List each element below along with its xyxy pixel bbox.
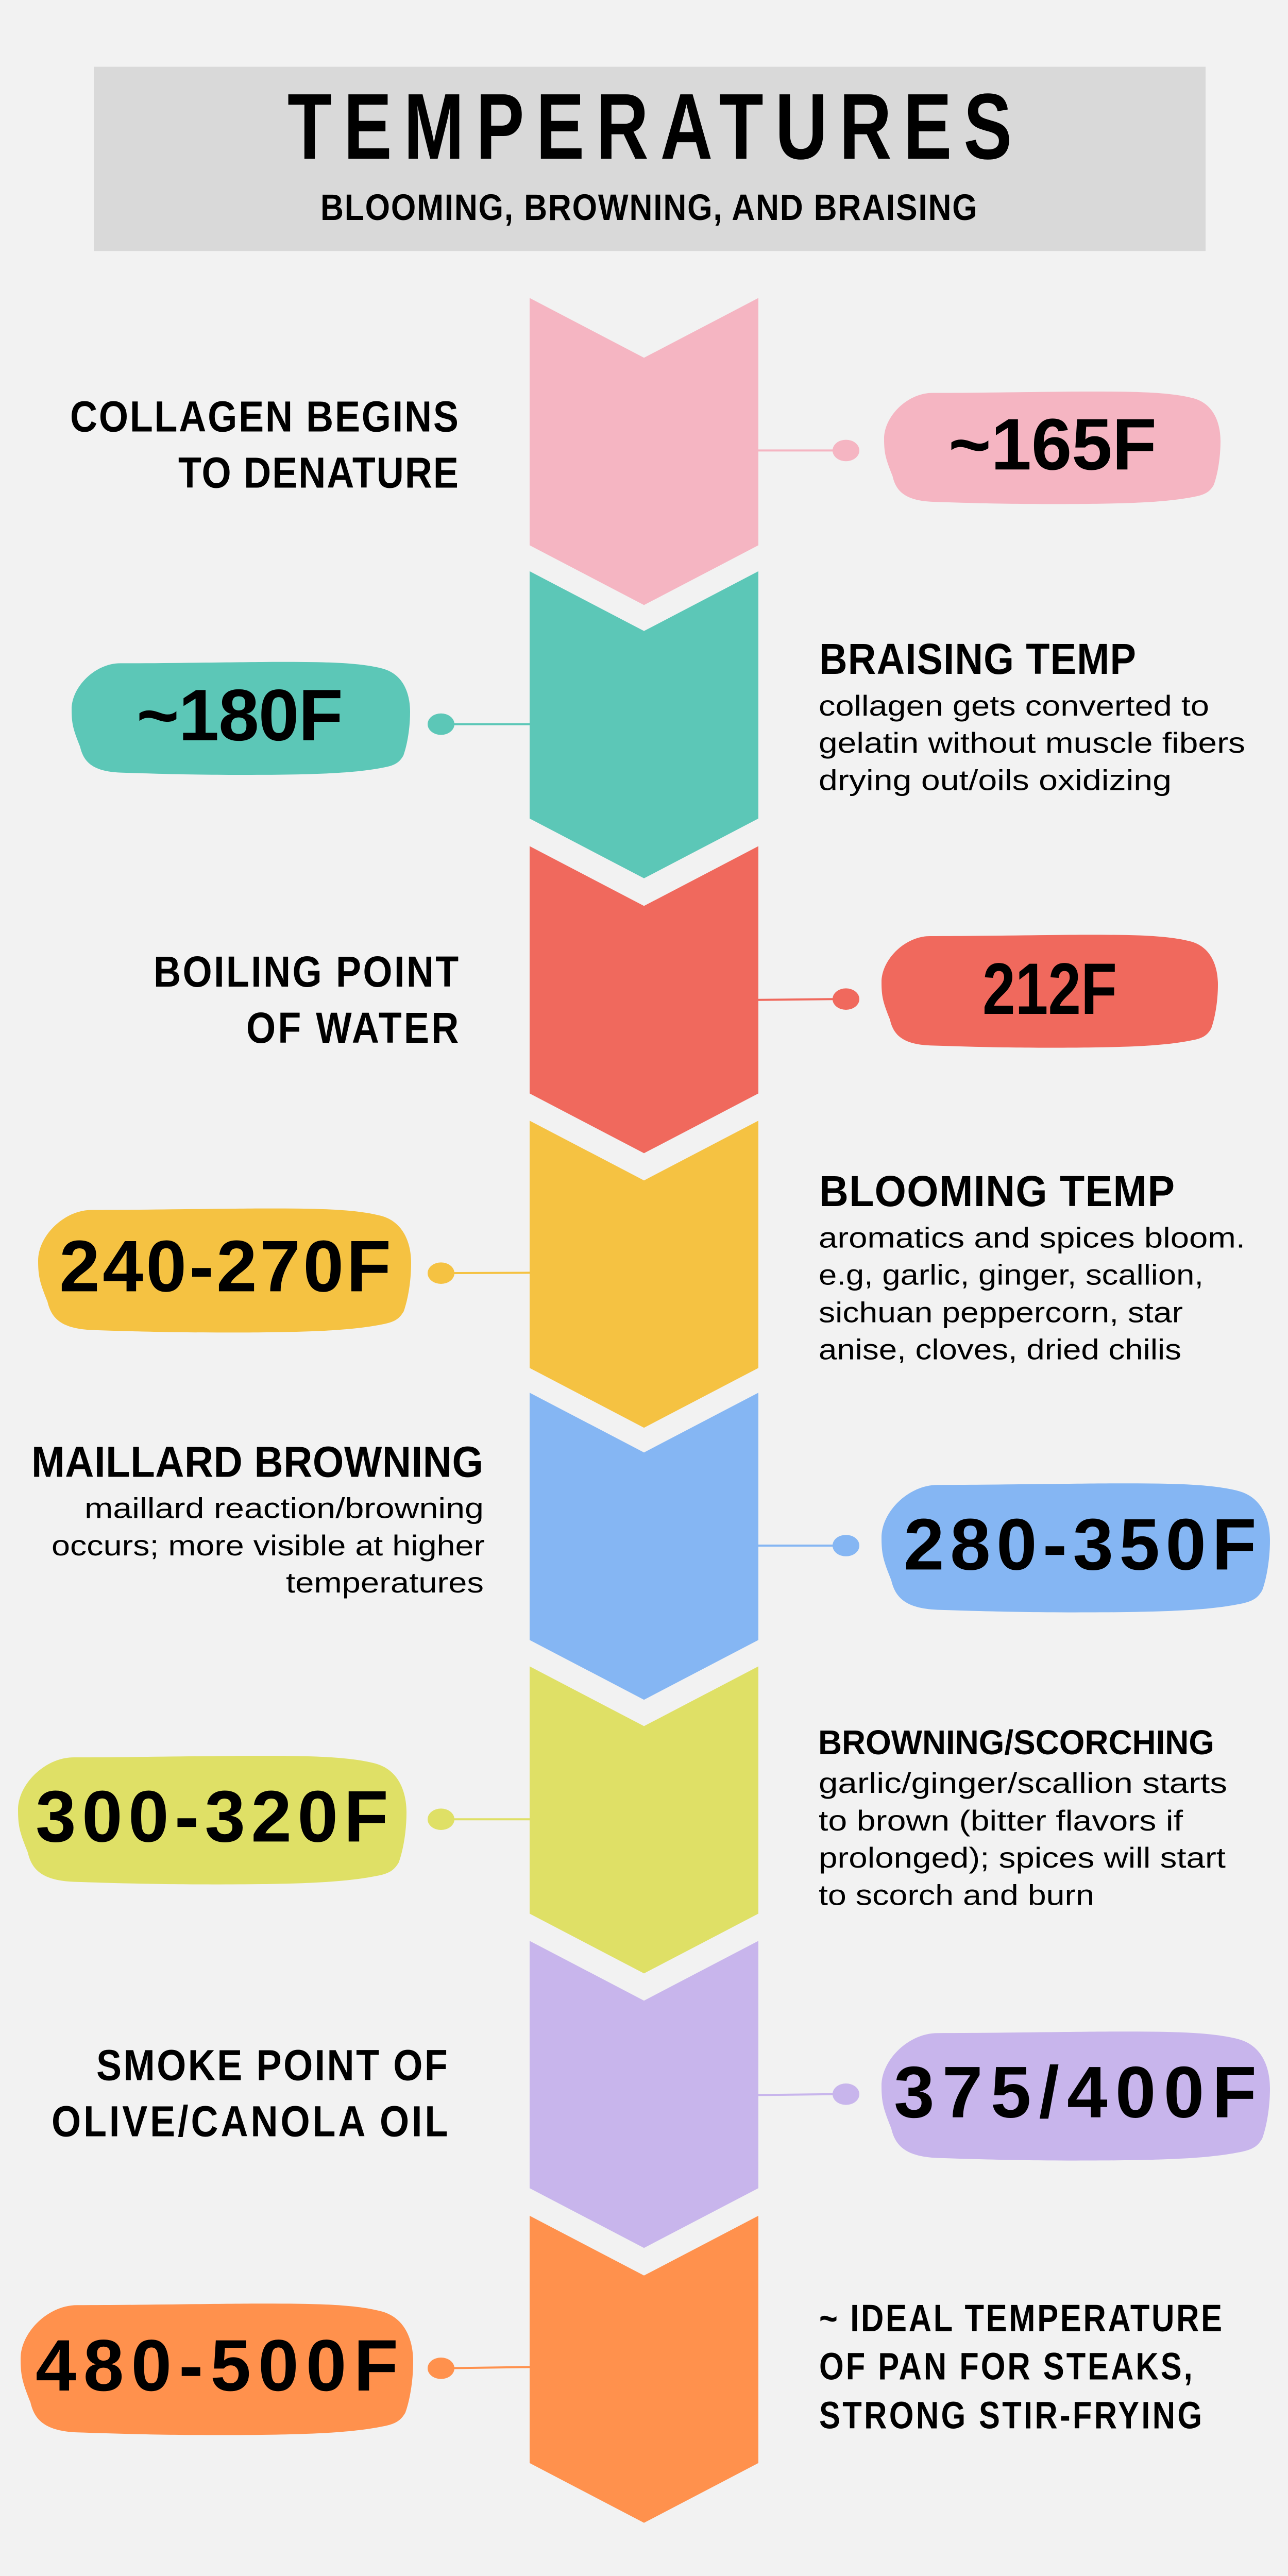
label: smoke point of olive/canola oil (52, 2041, 448, 2145)
connector (758, 2083, 859, 2105)
description: browning / scorching: prolonged); spices will start (819, 1842, 1226, 1874)
connector (428, 714, 530, 735)
description: blooming temp: aromatics and spices bloom. (819, 1222, 1245, 1254)
label: ideal temperature of pan: ~ IDEAL TEMPERATURE (819, 2297, 1222, 2340)
description: blooming temp: e.g, garlic, ginger, scallion, (819, 1259, 1204, 1291)
chevron: red (530, 846, 758, 1153)
temperature badge: 280-350F (882, 1483, 1270, 1613)
label: collagen begins to denature (70, 393, 459, 497)
description: braising temp: BRAISING TEMP (819, 635, 1136, 683)
temperature badge: 480-500F: 480-500F (36, 2325, 398, 2406)
temperature badge: 212F (882, 935, 1218, 1048)
step 5: maillard browning (31, 1393, 1270, 1700)
chevron: lavender (530, 1941, 758, 2248)
description: blooming temp (819, 1167, 1245, 1366)
label: collagen begins to denature: TO DENATURE (178, 449, 459, 497)
description: braising temp: drying out/oils oxidizing (819, 765, 1172, 796)
step 7: smoke point (52, 1941, 1270, 2248)
connector (758, 988, 859, 1010)
description: browning / scorching: to scorch and burn (819, 1879, 1094, 1911)
description: braising temp (819, 635, 1245, 796)
temperature badge: 212F: 212F (982, 948, 1117, 1029)
connector (428, 1262, 530, 1284)
connector (758, 440, 859, 461)
temperature badge: 280-350F: 280-350F (904, 1504, 1257, 1585)
step 3: boiling point (154, 846, 1218, 1153)
temperature badge: 480-500F (21, 2303, 413, 2435)
description: braising temp: gelatin without muscle fibers (819, 727, 1245, 759)
chevron: lime (530, 1666, 758, 1973)
step 6: browning / scorching (18, 1666, 1227, 1973)
step 1: collagen denature (70, 298, 1221, 605)
description: maillard browning: maillard reaction/browning (84, 1493, 484, 1524)
description: maillard browning: temperatures (286, 1567, 484, 1599)
temperature badge: 240-270F: 240-270F (59, 1226, 391, 1307)
label: ideal temperature of pan: STRONG STIR-FRYING (819, 2394, 1202, 2437)
chevron: pink (530, 298, 758, 605)
temperature badge: 165F: ~165F (948, 404, 1157, 485)
chevron: orange (530, 2216, 758, 2523)
temperature badge: 375/400F: 375/400F (894, 2052, 1257, 2133)
temperature badge: 240-270F (38, 1209, 411, 1332)
header panel (94, 67, 1206, 251)
chevron: yellow (530, 1121, 758, 1428)
description: browning / scorching (818, 1723, 1227, 1911)
label: boiling point of water (154, 948, 459, 1052)
temperature badge: 375/400F (882, 2031, 1270, 2161)
label: ideal temperature of pan: OF PAN FOR STEAKS, (819, 2345, 1193, 2388)
temperature badge: 180F (72, 662, 410, 775)
connector (428, 1808, 530, 1830)
label: smoke point of olive/canola oil: OLIVE/CANOLA OIL (52, 2097, 448, 2145)
title: TEMPERATURES (287, 75, 1012, 179)
label: smoke point of olive/canola oil: SMOKE POINT OF (96, 2041, 448, 2090)
subtitle: BLOOMING, BROWNING, AND BRAISING (320, 187, 977, 228)
description: maillard browning: MAILLARD BROWNING (31, 1438, 483, 1486)
description: browning / scorching: to brown (bitter flavors if (819, 1805, 1183, 1837)
chevron: teal (530, 571, 758, 878)
description: blooming temp: sichuan peppercorn, star (819, 1297, 1183, 1329)
temperature badge: 300-320F (18, 1756, 406, 1885)
temperature badge: 300-320F: 300-320F (36, 1776, 388, 1857)
temperature badge: 165F (884, 392, 1221, 504)
label: boiling point of water: OF WATER (246, 1004, 459, 1052)
description: browning / scorching: garlic/ginger/scallion starts (819, 1768, 1227, 1799)
description: maillard browning (31, 1438, 485, 1599)
description: blooming temp: anise, cloves, dried chilis (819, 1334, 1181, 1366)
temperature badge: 180F: ~180F (137, 675, 343, 756)
chevron: blue (530, 1393, 758, 1700)
step 2: braising temp (72, 571, 1245, 878)
label: collagen begins to denature: COLLAGEN BEGINS (70, 393, 459, 441)
connector (428, 2358, 530, 2379)
description: braising temp: collagen gets converted to (819, 690, 1209, 722)
description: maillard browning: occurs; more visible at higher (52, 1530, 485, 1562)
step 4: blooming temp (38, 1121, 1245, 1428)
description: blooming temp: BLOOMING TEMP (819, 1167, 1175, 1215)
label: ideal temperature of pan (819, 2297, 1222, 2437)
step 8: pan for steaks (21, 2216, 1222, 2523)
label: boiling point of water: BOILING POINT (154, 948, 459, 996)
header background (94, 67, 1206, 251)
connector (758, 1535, 859, 1556)
